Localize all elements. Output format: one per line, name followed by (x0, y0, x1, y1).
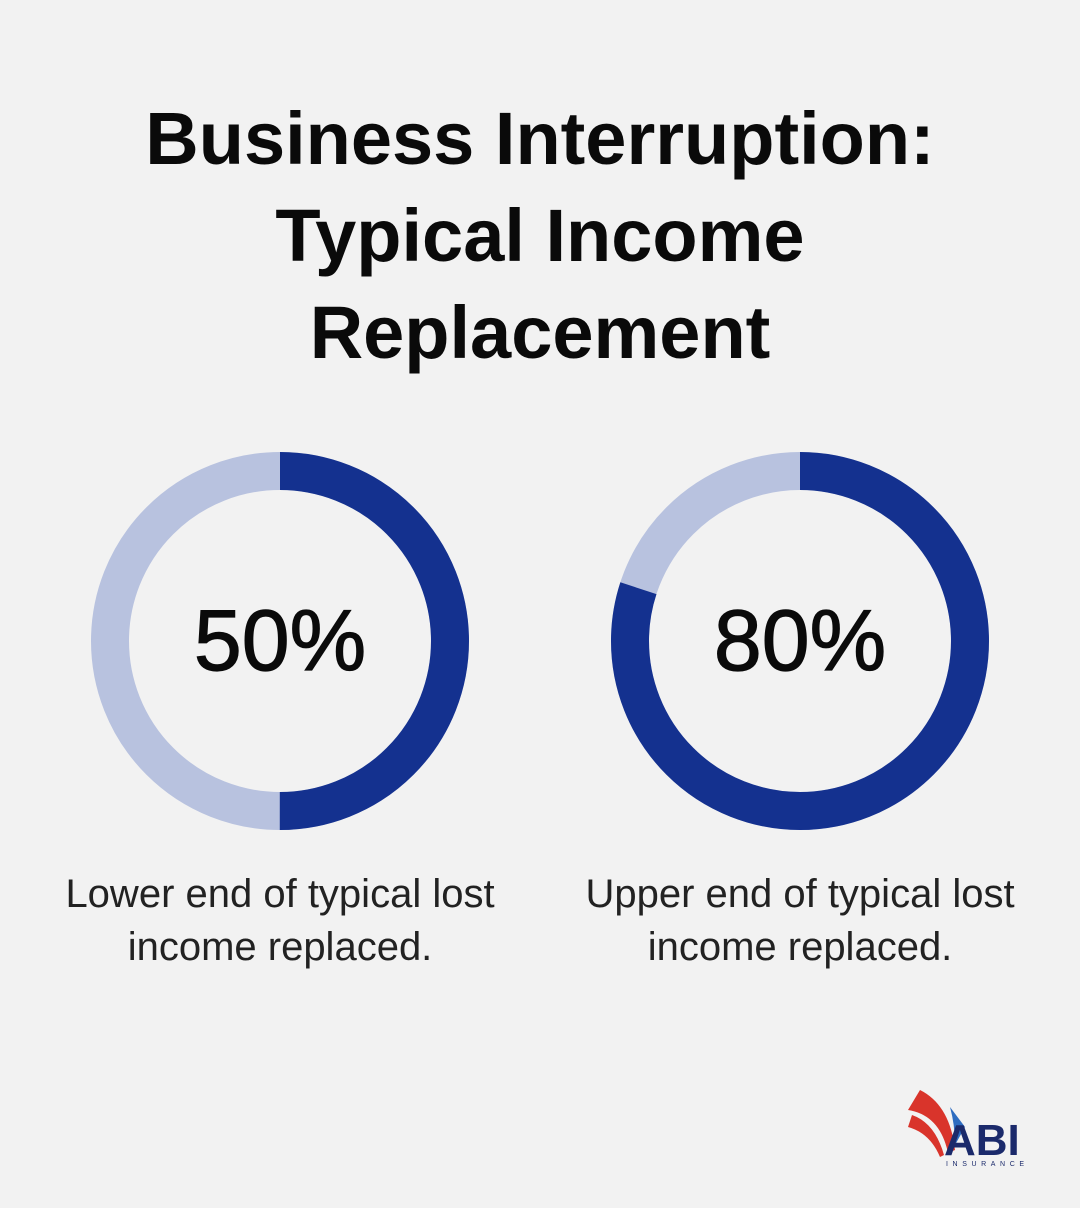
caption: upper end: income replaced. (648, 925, 952, 969)
donut chart: 80%: 80% (714, 593, 886, 689)
caption: upper end: Upper end of typical lost (585, 872, 1015, 916)
caption: upper end (585, 872, 1015, 969)
logo: ABI Insurance (908, 1090, 1029, 1168)
logo: ABI Insurance: ABI (944, 1116, 1020, 1165)
title: Business Interruption: (145, 97, 935, 180)
title (145, 97, 935, 374)
title: Replacement (310, 291, 770, 374)
title: Typical Income (275, 194, 805, 277)
donut chart: 80% (611, 452, 989, 830)
caption: lower end: Lower end of typical lost (65, 872, 495, 916)
caption: lower end: income replaced. (128, 925, 432, 969)
donut chart: 50% (91, 452, 469, 830)
donut chart: 50%: 50% (194, 593, 366, 689)
caption: lower end (65, 872, 495, 969)
logo: ABI Insurance: INSURANCE (946, 1161, 1029, 1168)
